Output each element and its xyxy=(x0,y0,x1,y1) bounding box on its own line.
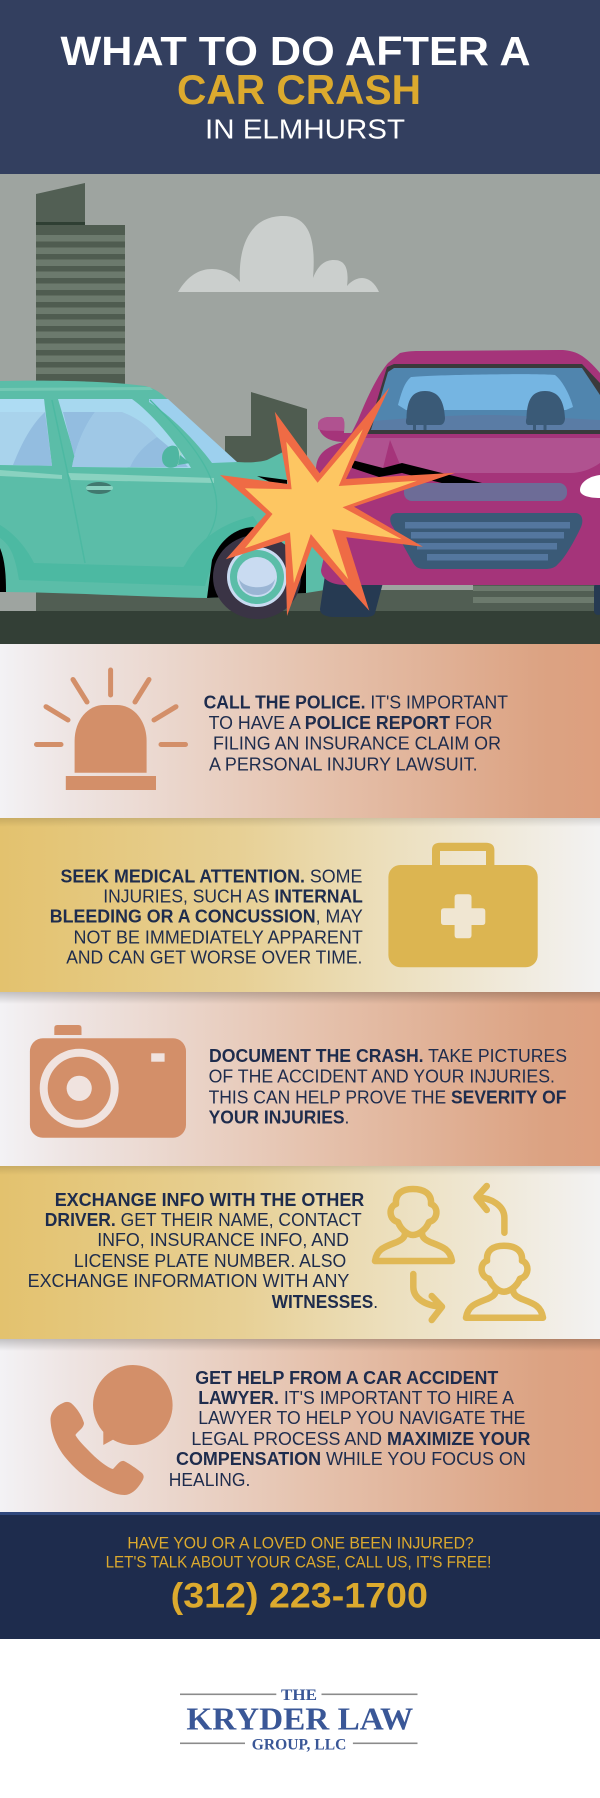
logo: the kryder law group: THE xyxy=(281,1687,317,1704)
front wheel xyxy=(213,535,301,619)
text: exchange info: INFO, INSURANCE INFO, AND xyxy=(97,1230,349,1250)
text: exchange info: EXCHANGE INFO WITH THE OTHER xyxy=(55,1190,364,1210)
text: seek medical attention: INJURIES, SUCH AS INTERNAL xyxy=(103,887,363,907)
text: document the crash: OF THE ACCIDENT AND YOUR INJURIES. xyxy=(209,1066,555,1086)
icon: two people exchanging xyxy=(375,1186,543,1320)
cta text: LET'S TALK ABOUT YOUR CASE, CALL US, IT'S FREE! xyxy=(106,1552,491,1571)
text: seek medical attention xyxy=(50,866,363,967)
text: exchange info: WITNESSES. xyxy=(272,1292,378,1312)
cta text: HAVE YOU OR A LOVED ONE BEEN INJURED? xyxy=(127,1533,474,1552)
person one xyxy=(375,1189,452,1261)
text: seek medical attention: SEEK MEDICAL ATTENTION. SOME xyxy=(60,866,362,886)
text: seek medical attention: BLEEDING OR A CONCUSSION, MAY xyxy=(50,907,363,927)
logo: the kryder law group: KRYDER LAW xyxy=(186,1700,413,1736)
seats xyxy=(406,391,565,430)
arrow: down right xyxy=(413,1274,442,1320)
panel: document the crash xyxy=(0,992,600,1166)
panel: get help from a lawyer xyxy=(0,1339,600,1512)
text: get help: HEALING. xyxy=(169,1470,250,1490)
text: get help xyxy=(169,1368,530,1490)
text: exchange info: EXCHANGE INFORMATION WITH ANY xyxy=(28,1271,349,1291)
text: call the police: FILING AN INSURANCE CLAIM OR xyxy=(213,733,501,753)
person two xyxy=(466,1246,543,1318)
text: get help: LEGAL PROCESS AND MAXIMIZE YOUR xyxy=(191,1429,530,1449)
panel: call the police xyxy=(0,644,600,818)
text: seek medical attention: AND CAN GET WORSE OVER TIME. xyxy=(66,947,362,967)
panel: seek medical attention xyxy=(0,818,600,992)
illustration: car crash scene xyxy=(0,174,600,644)
text: call the police: A PERSONAL INJURY LAWSUIT. xyxy=(209,754,478,774)
green car xyxy=(0,381,325,619)
text: document the crash: DOCUMENT THE CRASH. TAKE PICTURES xyxy=(209,1046,567,1066)
header banner xyxy=(0,0,600,174)
text: document the crash: YOUR INJURIES. xyxy=(209,1107,349,1127)
arrow: up left xyxy=(476,1186,504,1233)
text: document the crash: THIS CAN HELP PROVE THE SEVERITY OF xyxy=(209,1087,566,1107)
text: get help: LAWYER. IT'S IMPORTANT TO HIRE A xyxy=(198,1388,514,1408)
text: call the police: TO HAVE A POLICE REPORT FOR xyxy=(209,713,492,733)
logo: the kryder law group xyxy=(180,1687,418,1753)
footer call to action xyxy=(0,1512,600,1639)
text: exchange info xyxy=(28,1190,378,1312)
cloud xyxy=(178,216,379,292)
text: get help: LAWYER TO HELP YOU NAVIGATE THE xyxy=(198,1408,525,1428)
text: get help: COMPENSATION WHILE YOU FOCUS ON xyxy=(176,1449,526,1469)
small building xyxy=(225,392,307,540)
explosion xyxy=(220,387,455,616)
tall building xyxy=(36,183,125,611)
text: exchange info: DRIVER. GET THEIR NAME, CONTACT xyxy=(45,1210,362,1230)
icon: phone with speech bubble xyxy=(50,1365,173,1495)
icon: camera xyxy=(30,1025,186,1138)
title line 2: CAR CRASH xyxy=(177,66,421,113)
text: exchange info: LICENSE PLATE NUMBER. ALSO xyxy=(74,1251,346,1271)
text: call the police xyxy=(204,692,508,774)
text: document the crash xyxy=(209,1046,567,1127)
ground xyxy=(0,611,600,644)
icon: first aid kit xyxy=(388,843,538,967)
title line 1: WHAT TO DO AFTER A xyxy=(60,28,530,74)
panel: exchange info xyxy=(0,1166,600,1339)
text: seek medical attention: NOT BE IMMEDIATELY APPARENT xyxy=(74,927,363,947)
icon: siren xyxy=(36,670,186,790)
street band xyxy=(36,584,600,611)
text: get help: GET HELP FROM A CAR ACCIDENT xyxy=(195,1368,498,1388)
pink car xyxy=(316,350,600,617)
cta text xyxy=(106,1533,491,1571)
phone number: (312) 223-1700 xyxy=(171,1576,428,1615)
text: call the police: CALL THE POLICE. IT'S IMPORTANT xyxy=(204,692,508,712)
logo: the kryder law group: GROUP, LLC xyxy=(252,1736,346,1753)
title line 3: IN ELMHURST xyxy=(205,114,405,144)
headlight xyxy=(580,475,600,498)
